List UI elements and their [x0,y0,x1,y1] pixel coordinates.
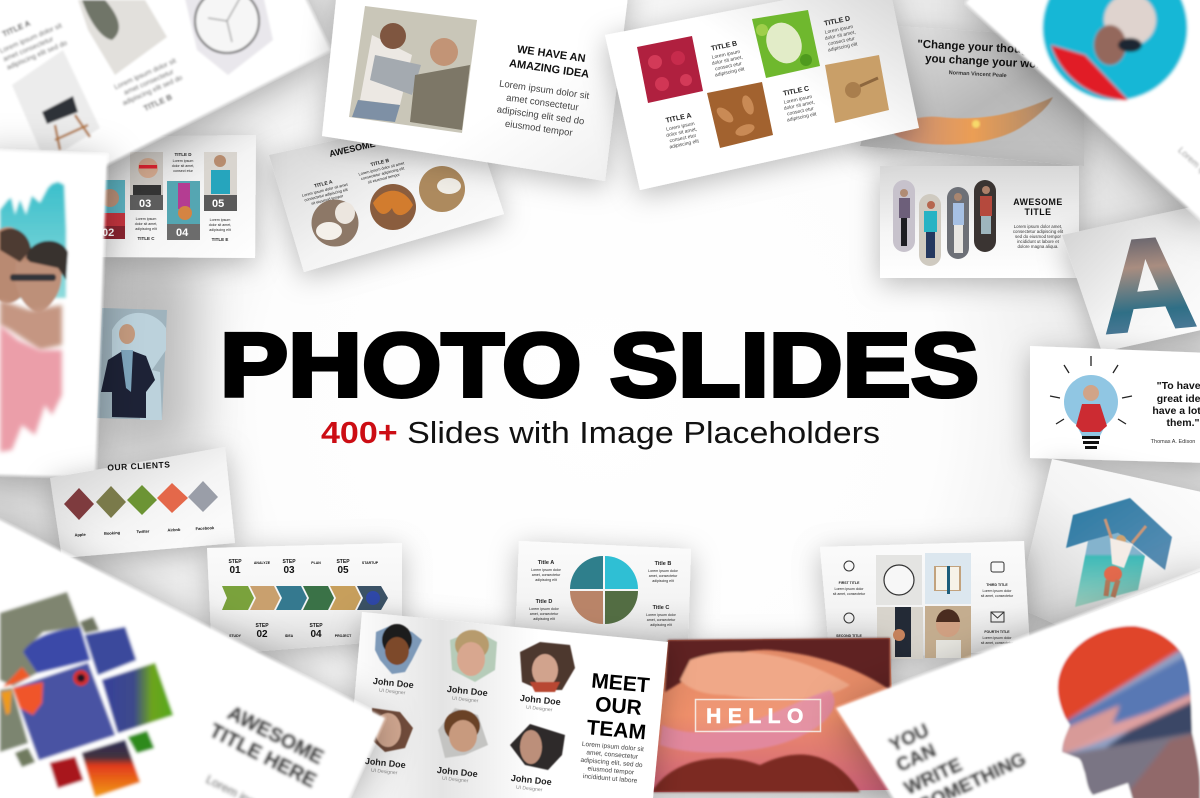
client names: Airbnb [167,527,181,533]
labels: amet, consectetur [532,573,561,577]
photo: wall clock [183,0,273,75]
captions: consect etur [669,133,697,144]
column 02 [100,180,125,239]
labels: sit eiusmod tempor [367,172,401,185]
body text: eiusmod tempor [587,765,635,777]
labels: Title B [655,561,671,567]
captions: dolor sit amet, [209,223,231,227]
steps bottom: STUDY [229,634,242,638]
arm and shoulder [0,300,62,350]
names: John Doe [519,693,561,707]
man's face [15,262,62,312]
head [119,324,135,344]
steps top: 01 [229,565,241,576]
captions: TITLE D [824,15,851,28]
captions: dolor sit amet, [666,127,698,139]
title: Lorem ipsum dolor amet, [1014,224,1062,229]
quote text: Thomas A. Edison [1151,439,1195,445]
icons and labels: Lorem ipsum dolor [835,587,864,591]
captions: TITLE D [174,152,192,157]
pie photos [570,556,638,624]
woman's hair [0,228,31,262]
photo: desk [877,607,923,659]
body text: Lorem ipsum dolor sit [498,78,590,102]
body text: incididunt ut labore [583,773,638,785]
captions: Lorem ipsum [136,217,156,221]
labels: TITLE B [370,158,390,168]
hello box: HELLO [706,705,810,728]
photo: raspberries [637,36,703,103]
slide: parrot mosaic [0,510,385,798]
slide: amazing idea [322,0,630,181]
blurred heading [886,720,1029,798]
names: John Doe [446,684,488,698]
steps top: STEP [228,559,242,565]
text block: title B: Lorem ipsum dolor sit [113,58,177,91]
quote text [1151,380,1200,445]
quote text: "Change your thoughts and [917,38,1069,58]
labels: Title C [653,605,669,611]
steps bottom: IDEA [285,634,294,638]
captions: adipiscing elit [669,138,700,151]
column 03: 03 [139,198,151,210]
main title: PHOTO SLIDES [220,316,979,416]
arch structure [112,313,166,420]
captions: dolor sit amet, [783,100,815,112]
captions: Lorem ipsum [666,121,695,133]
heading: title A: Lorem ipsum dolor sit [0,23,63,55]
labels: amet, consectetur [530,612,559,616]
labels: TITLE A [314,179,334,190]
title: consectetur adipiscing elit [1013,229,1064,234]
quote text [916,38,1069,82]
steps top: STARTUP [362,561,379,565]
slide: hello canyon [652,638,892,792]
roles: UI Designer [379,688,406,696]
captions: consect etur [828,36,856,47]
slide: icons with photo grid [820,541,1030,660]
steps bottom: 04 [310,629,322,640]
steps top: 03 [283,565,295,576]
names: John Doe [364,756,406,770]
captions: adipiscing elit [135,227,157,231]
title [1013,197,1064,249]
man's hair [26,241,68,280]
title: sed do eiusmod tempor [1015,234,1061,239]
column 02: 02 [102,227,114,239]
heading: MEET [590,669,651,697]
photo: almonds [707,82,773,148]
icons and labels: sit amet, consectetur [833,592,866,596]
captions: Lorem ipsum [210,218,230,222]
photo: coconut [312,200,358,246]
slide: quote with brush stroke [860,26,1084,166]
photo: chair [12,50,100,150]
text block: title B: amet consectetur [123,68,176,97]
slide: meet our team [345,612,668,798]
slide: awesome title with pill photos [880,166,1079,278]
labels: Lorem ipsum dolor [646,613,677,617]
column 03 [130,152,163,210]
heading: title A: adipiscing elit sed do [6,40,69,72]
heading: AMAZING IDEA [508,58,590,81]
slide: light bulb quote [1030,346,1200,463]
text block: title B [113,58,190,121]
heading: AWESOME [328,139,376,159]
heading: title A [0,8,70,72]
icons and labels: FIRST TITLE [839,581,860,585]
slide: food circles [269,110,504,272]
suit [101,350,155,418]
subtitle: 400+ Slides with Image Placeholders [321,415,880,450]
title: dolore magna aliqua. [1017,244,1059,249]
icons and labels: SECOND TITLE [836,634,862,638]
photo: clock [876,555,922,605]
captions: dolor sit amet, [824,30,856,42]
photo: oats with spoon [825,55,889,123]
captions: Lorem ipsum [783,94,813,106]
captions: TITLE B [711,40,738,53]
parrot eye [73,670,89,686]
client names: Facebook [195,525,215,531]
roles: UI Designer [442,776,469,784]
parrot tiles [0,592,173,797]
roles: UI Designer [452,696,479,704]
labels [298,154,410,208]
column 04: 04 [176,227,189,239]
arrow photo [1066,498,1172,607]
steps bottom: STEP [255,623,269,629]
brush stroke photo [893,97,1053,145]
blurred heading: CAN [893,740,939,777]
captions: adipiscing elit [714,66,746,79]
labels: adipiscing elit [650,623,672,627]
photo: plant [78,0,167,75]
slide: numbered portraits [98,135,256,258]
text block: title B: TITLE B [142,92,174,113]
icons and labels: sit amet, consectetur [981,641,1014,645]
steps top: 05 [337,565,349,576]
labels: adipiscing elit [652,579,674,583]
sunset highlight [972,120,980,128]
soft shade behind left slides [100,255,195,455]
captions: Lorem ipsum [173,159,193,163]
column 05: 05 [212,198,224,210]
slide: steps chevrons [207,543,402,655]
slide: top left product shots [0,0,330,165]
icons and labels: FOURTH TITLE [984,630,1010,634]
captions: Lorem ipsum [711,49,741,61]
steps top: ANALYZE [254,561,271,565]
woman's hair and face [0,227,32,303]
captions: consect etur [173,169,194,173]
quote text: them." [1167,417,1200,429]
captions: dolor sit amet, [711,55,743,67]
heading: WE HAVE AN [516,44,586,65]
icon: bulb with portrait [1050,356,1132,449]
captions: adipiscing elit [786,111,818,124]
names [364,676,561,787]
hello box [696,700,820,732]
text block: title B: adipiscing elit sed do [122,74,184,107]
captions: TITLE E [212,237,228,242]
labels: sit eiusmod tempor [311,193,344,206]
heading: title A: TITLE A [1,19,32,39]
slide: left couple photo [0,150,107,477]
labels: adipiscing elit [535,578,557,582]
client names: Twitter [136,528,150,534]
body text [493,78,590,141]
client names: Apple [74,532,87,537]
icons and labels: Lorem ipsum dolor [835,640,864,644]
labels: adipiscing elit [533,617,555,621]
body text: amet consectetur [505,93,579,114]
quote text: you change your world." [925,53,1060,72]
labels: amet, consectetur [649,574,678,578]
body text: eiusmod tempor [504,119,573,139]
labels [529,560,679,627]
captions: adipiscing elit [209,228,231,232]
labels: Lorem ipsum dolor [529,607,560,611]
title: TITLE [1025,207,1051,217]
labels: Lorem ipsum dolor sit amet [301,181,349,198]
blurred heading: YOU [886,720,932,757]
diamond photos [64,481,218,520]
labels: consectetur adipiscing elit [304,187,349,202]
slide: top right portrait circle [966,0,1200,232]
team member: bottom row [372,708,565,770]
labels: Lorem ipsum dolor sit amet [358,160,406,177]
heading [493,42,595,141]
slide: food tiles [605,0,919,190]
slide: our clients [50,447,235,558]
steps top: PLAN [311,561,321,565]
slide: circle quadrants [515,541,691,645]
pink clothing [0,325,62,452]
captions: TITLE C [138,236,155,241]
photo: plant leaves [82,0,119,40]
team member: top row [375,624,575,692]
heading: title A: amet consectetur [2,36,55,63]
steps bottom: STEP [309,623,323,629]
photo: basket [419,166,465,212]
heading: OUR [594,693,643,720]
letter A: A [1094,207,1200,361]
body text: adipiscing elit, sed do [580,757,643,769]
labels: consectetur adipiscing elit [360,165,406,181]
column 05 [204,152,237,211]
names: John Doe [510,773,552,787]
heading: TEAM [586,716,647,744]
labels: Title D [536,599,552,605]
roles: UI Designer [516,785,543,793]
roles: UI Designer [526,705,553,713]
steps top [228,559,379,576]
heading: OUR CLIENTS [107,459,171,473]
client names [74,525,215,537]
icons and labels: THIRD TITLE [986,583,1008,587]
captions: consect etur [787,106,815,117]
roles [371,688,553,793]
icons and labels: sit amet, consectetur [981,594,1014,598]
heading [579,669,651,785]
captions: adipiscing elit [827,41,859,54]
labels: Lorem ipsum dolor [531,568,562,572]
chevron photos [222,586,388,610]
sunglasses [10,274,56,281]
body text: adipiscing elit sed do [496,104,585,127]
captions: dolor sit amet, [172,164,194,168]
captions [135,152,231,242]
body text: amet, consectetur [586,749,639,761]
photo: couple with laptop [349,6,477,133]
captions [663,15,859,151]
pill photos [893,180,996,266]
steps bottom [229,623,352,640]
head photo [1056,624,1200,798]
roles: UI Designer [371,768,398,776]
shirt and tie [121,350,133,392]
quote text: Norman Vincent Peale [949,70,1007,79]
steps bottom: PROJECT [335,634,352,638]
slide: arrow photo [1017,459,1200,625]
body text [579,741,645,785]
teal brush photo [0,182,66,298]
client names: Booking [104,530,121,536]
labels: Title A [538,560,554,566]
photo: book [925,553,971,604]
names: John Doe [436,765,478,779]
icons and labels [833,561,1014,645]
blurred heading: AWESOME [224,702,327,769]
names: John Doe [372,676,414,690]
steps top: STEP [336,559,350,565]
photo: man in suit [97,308,167,420]
icons and labels: Lorem ipsum dolor [983,589,1012,593]
figure in arrow [1104,519,1146,597]
slide: head silhouette [836,565,1200,798]
slide: letter A photo [1062,203,1200,361]
body text: Lorem ipsum dolor sit [582,741,644,753]
blurred heading: TITLE HERE [206,720,320,792]
captions: dolor sit amet, [135,222,157,226]
labels: amet, consectetur [647,618,676,622]
captions: TITLE C [783,85,810,98]
portrait circle [1043,0,1187,100]
title: incididunt ut labore et [1017,239,1060,244]
icons and labels: Lorem ipsum dolor [983,636,1012,640]
title: AWESOME [1013,197,1063,207]
steps top: STEP [282,559,296,565]
photo: green apple [752,10,820,78]
photo: woman with glasses [925,606,971,658]
captions: Lorem ipsum [824,24,854,36]
captions: consect etur [715,61,743,72]
column 04 [167,181,200,240]
labels: Lorem ipsum dolor [648,569,679,573]
steps bottom: 02 [256,629,268,640]
photo: croissant [370,184,416,230]
captions: TITLE A [665,112,692,125]
canyon shapes [652,638,890,792]
